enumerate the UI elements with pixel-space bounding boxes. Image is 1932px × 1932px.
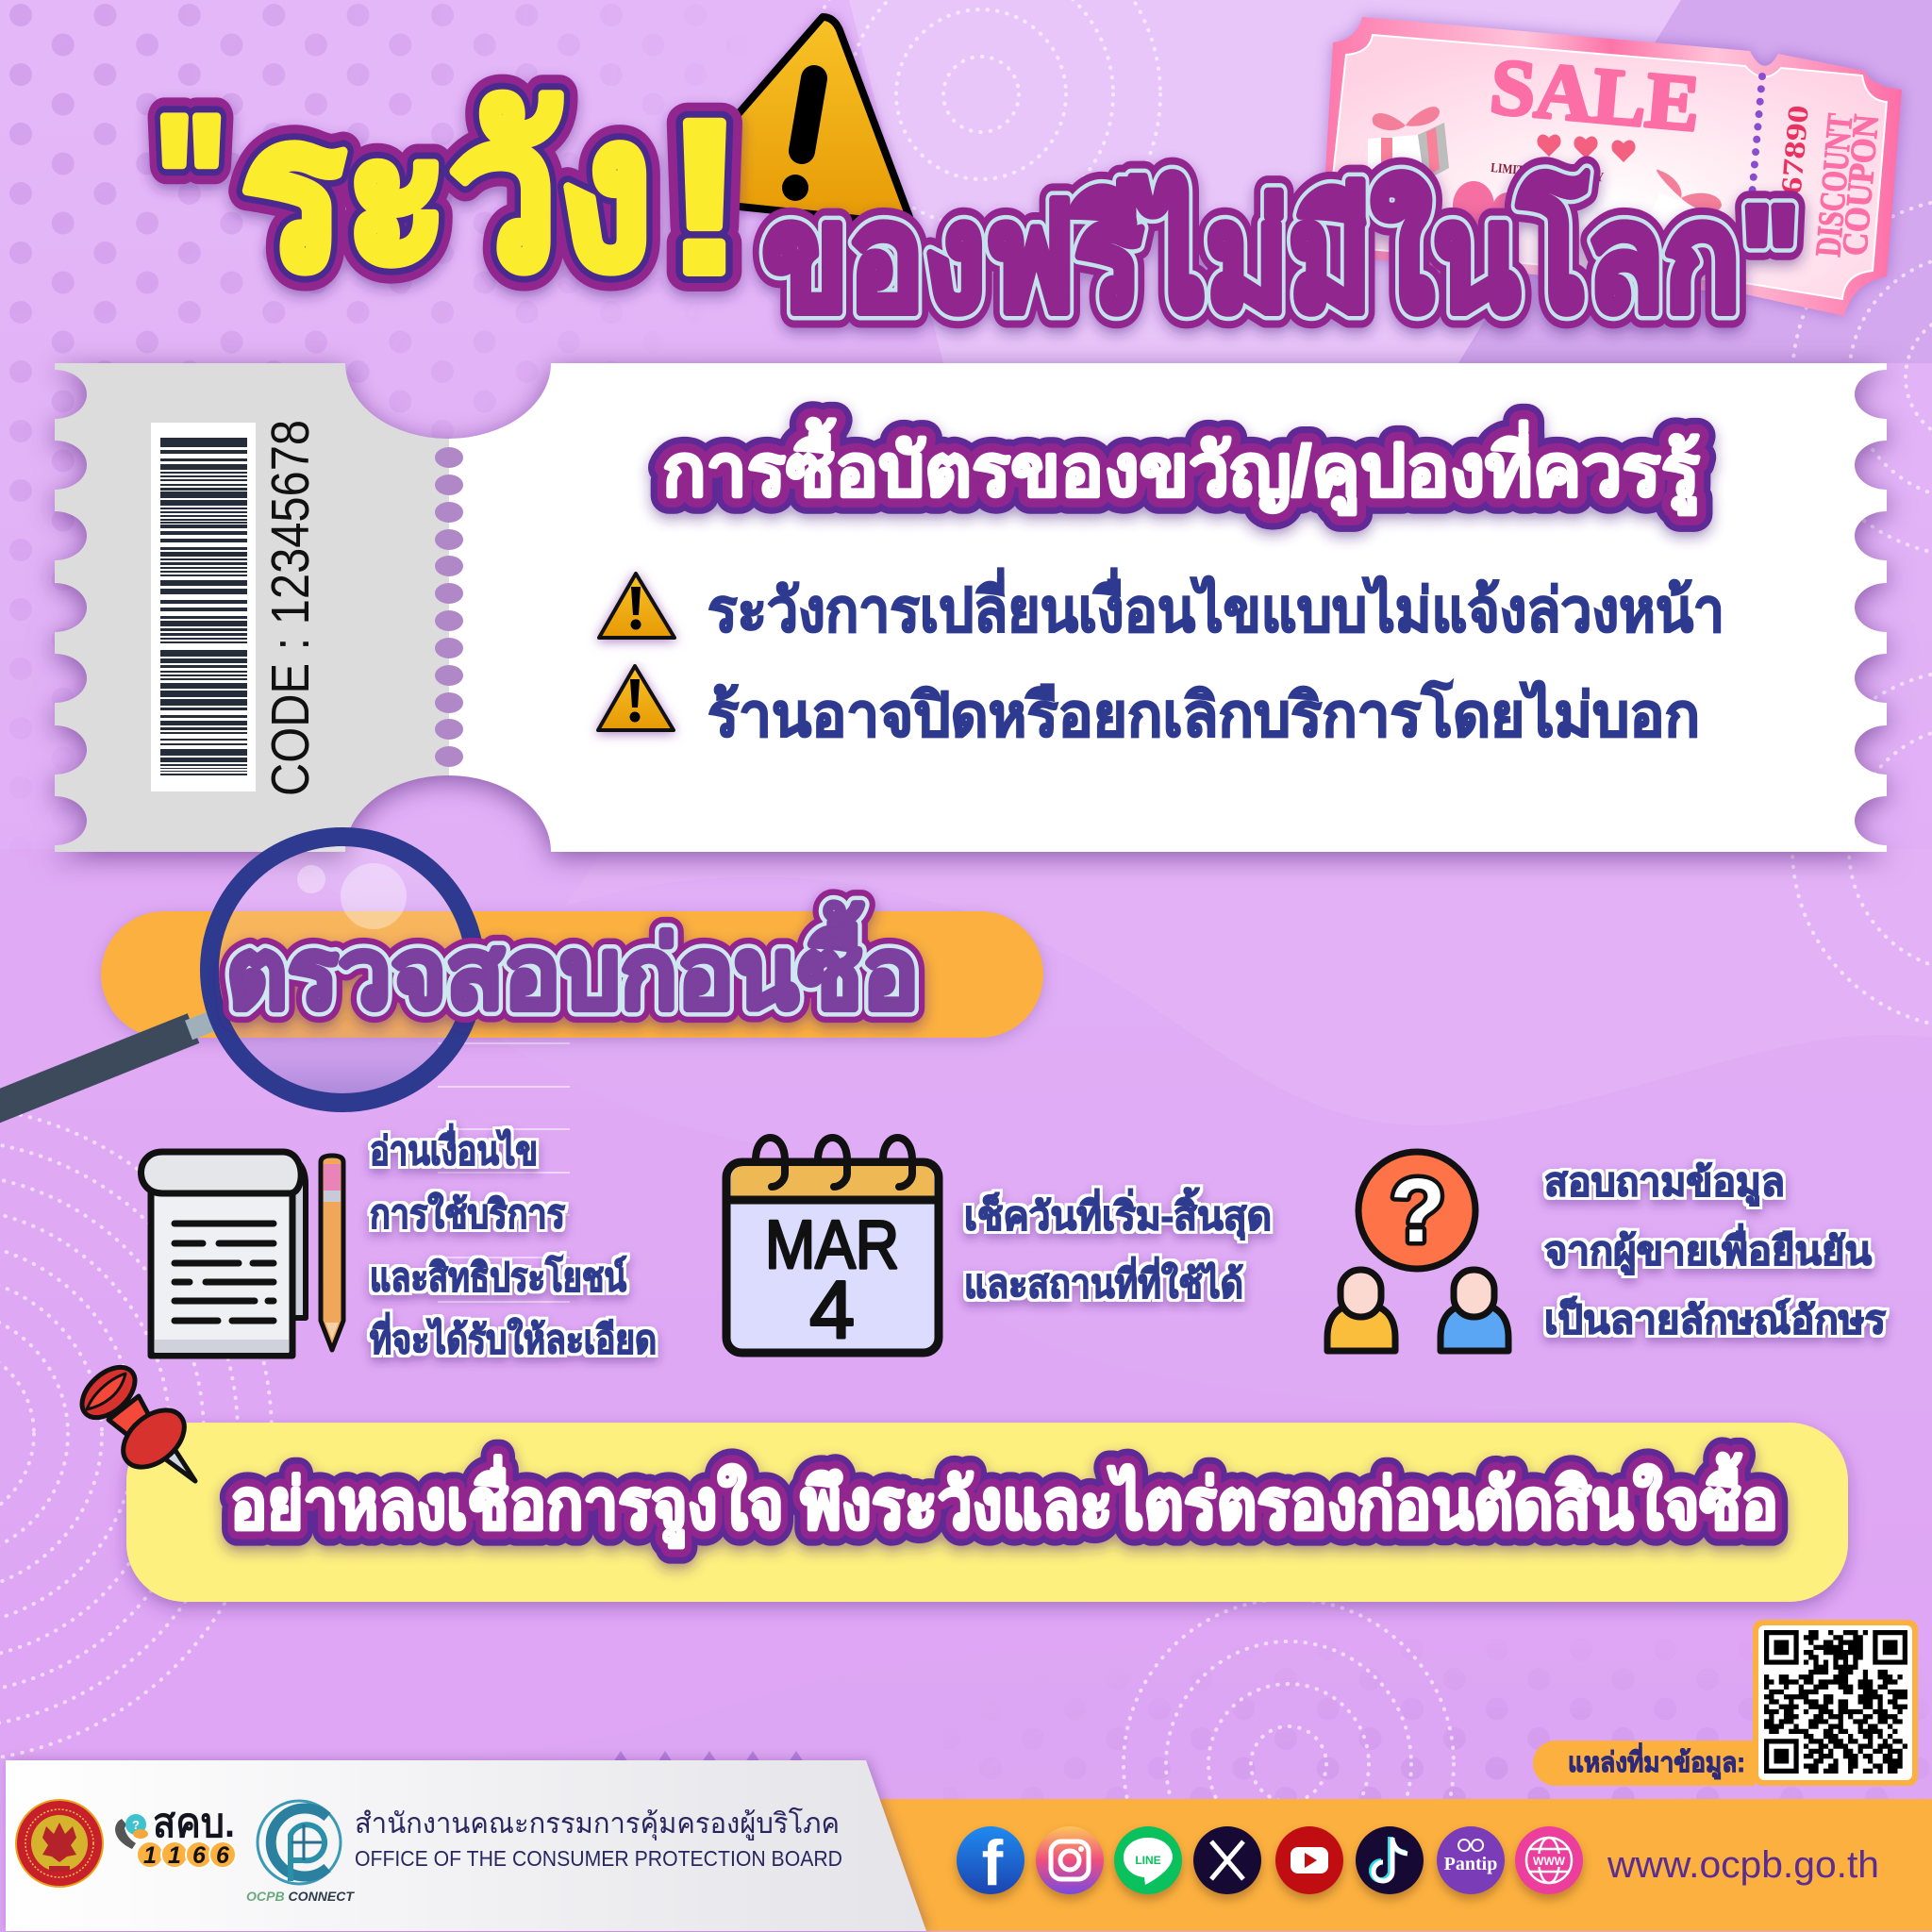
coupon illustration: LIMITED TIME ONLY <box>1491 161 1605 185</box>
text: ask seller: จากผู้ขายเพื่อยืนยัน <box>1544 1224 1872 1275</box>
logo: 1166 hotline: 1 <box>143 1842 157 1869</box>
coupon illustration: SALE <box>1487 42 1704 148</box>
text: read terms: และสิทธิประโยชน์ <box>370 1255 626 1299</box>
title: ระวัง!: " <box>154 77 227 288</box>
icon: website <box>1515 1826 1583 1894</box>
title: ระวัง!: ! <box>666 75 743 318</box>
text: ask seller: สอบถามข้อมูล <box>1544 1160 1785 1207</box>
panel: coupon ticket <box>55 363 1887 852</box>
coupon illustration: 567890 <box>1773 104 1815 214</box>
heading: what to know: การซื้อบัตรของขวัญ/คูปองที่ควรรู้ <box>662 418 1700 515</box>
logo: 1166 hotline: 6 <box>192 1842 207 1869</box>
source label: แหล่งที่มาข้อมูล: <box>1568 1742 1745 1779</box>
text: check dates <box>964 1188 1272 1306</box>
text: read terms: ที่จะได้รับให้ละเอียด <box>370 1312 657 1361</box>
logo: 1166 hotline: ? <box>132 1818 140 1832</box>
text: read terms: อ่านเงื่อนไข <box>370 1124 538 1173</box>
agency name Thai: สำนักงานคณะกรรมการคุ้มครองผู้บริโภค <box>355 1807 840 1841</box>
social icons <box>957 1826 1583 1899</box>
icon: instagram <box>1036 1826 1104 1894</box>
text: ask seller: เป็นลายลักษณ์อักษร <box>1544 1296 1886 1341</box>
icon: tiktok <box>1356 1826 1424 1894</box>
icon: facebook: f <box>982 1827 1004 1899</box>
banner text: อย่าหลงเชื่อการจูงใจ พึงระวังและไตร่ตรองก่อนตัดสินใจซื้อ <box>230 1453 1778 1548</box>
barcode code text: CODE : 12345678 <box>260 420 321 796</box>
title: ระวัง!: ! <box>666 75 743 318</box>
icon: warning 1 <box>599 574 675 638</box>
logo: 1166 hotline: 1 <box>168 1842 181 1869</box>
source label <box>1533 1740 1755 1786</box>
icon: line: LINE <box>1135 1854 1161 1867</box>
heading: check before buying: ตรวจสอบก่อนซื้อ <box>226 902 919 1029</box>
icon: youtube <box>1275 1826 1343 1894</box>
agency name English: OFFICE OF THE CONSUMER PROTECTION BOARD <box>355 1846 842 1871</box>
icon: magnifier <box>0 837 475 1109</box>
title: ระวัง!: " <box>154 77 227 288</box>
text: read terms <box>370 1124 657 1361</box>
title: ระวัง!: ระวัง <box>241 75 653 312</box>
coupon illustration: COUPON <box>1835 113 1887 258</box>
icon: warning 2 <box>598 666 674 730</box>
ticket shape <box>55 363 1887 852</box>
decorative thin lines <box>438 1043 570 1302</box>
icon: pantip <box>1437 1826 1505 1894</box>
text: check dates: เช็ควันที่เริ่ม-สิ้นสุด <box>964 1188 1272 1241</box>
icon: people asking question: ? <box>1391 1160 1445 1261</box>
title: ระวัง!: ระวัง <box>241 75 653 312</box>
perforation <box>435 447 463 767</box>
icon: X <box>1193 1826 1261 1894</box>
logo: OCPB connect: OCPB CONNECT <box>246 1889 355 1904</box>
logo: 1166 hotline: 6 <box>216 1842 230 1869</box>
icon: facebook <box>957 1826 1024 1899</box>
warning text 1: ระวังการเปลี่ยนเงื่อนไขแบบไม่แจ้งล่วงหน้า <box>708 568 1724 644</box>
orange pill <box>101 911 1043 1038</box>
heading: what to know: การซื้อบัตรของขวัญ/คูปองที่ควรรู้ <box>662 418 1700 515</box>
heading: check before buying: ตรวจสอบก่อนซื้อ <box>226 902 919 1029</box>
icon: calendar: 4 <box>809 1265 855 1356</box>
coupon illustration: DISCOUNT <box>1808 112 1860 258</box>
footer bar orange <box>877 1799 1932 1931</box>
logo: government seal <box>16 1800 103 1887</box>
icon: calendar: MAR <box>765 1208 899 1283</box>
website url: www.ocpb.go.th <box>1607 1844 1879 1886</box>
coupon illustration <box>1321 17 1902 316</box>
banner text: อย่าหลงเชื่อการจูงใจ พึงระวังและไตร่ตรองก่อนตัดสินใจซื้อ <box>230 1453 1778 1548</box>
logo: OCPB connect <box>246 1801 355 1904</box>
logo: 1166 hotline <box>115 1801 236 1869</box>
title: ระวัง!: ! <box>666 75 743 318</box>
text: check dates: และสถานที่ที่ใช้ได้ <box>964 1257 1243 1306</box>
heading: what to know: การซื้อบัตรของขวัญ/คูปองที่ควรรู้ <box>662 418 1700 515</box>
banner text: อย่าหลงเชื่อการจูงใจ พึงระวังและไตร่ตรองก่อนตัดสินใจซื้อ <box>230 1453 1778 1548</box>
icon: people asking question <box>1327 1152 1508 1351</box>
yellow banner <box>126 1423 1848 1602</box>
icon: notepad and pencil <box>142 1152 343 1356</box>
icon: calendar <box>726 1138 939 1356</box>
warning text 2: ร้านอาจปิดหรือยกเลิกบริการโดยไม่บอก <box>708 679 1700 749</box>
heading: check before buying: ตรวจสอบก่อนซื้อ <box>226 902 919 1029</box>
QR code <box>1753 1620 1918 1786</box>
icon: pantip: Pantip <box>1444 1854 1497 1874</box>
icon: large warning triangle <box>696 17 912 225</box>
title: ระวัง!: " <box>154 77 227 288</box>
text: ask seller <box>1544 1160 1886 1341</box>
text: read terms: การใช้บริการ <box>370 1191 565 1236</box>
icon: line <box>1114 1826 1182 1894</box>
title: ระวัง!: ระวัง <box>241 75 653 312</box>
logo: 1166 hotline: สคบ. <box>153 1801 235 1846</box>
icon: push pin <box>73 1357 195 1481</box>
barcode <box>151 423 256 791</box>
footer panel <box>6 1760 926 1931</box>
icon: website: WWW <box>1533 1855 1566 1868</box>
